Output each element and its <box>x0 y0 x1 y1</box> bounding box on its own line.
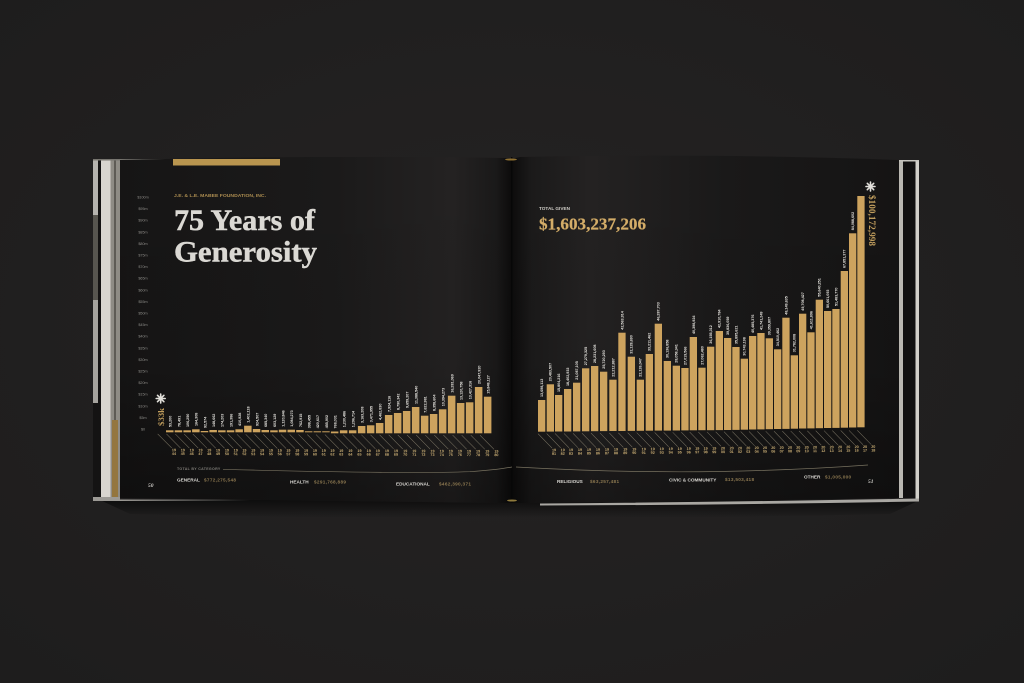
left year labels: 76 <box>458 453 462 457</box>
left year labels: 72 <box>421 453 425 457</box>
right bar value labels: 18,402,933 <box>566 368 570 386</box>
right year labels: 20 <box>846 445 850 449</box>
right year labels: 20 <box>796 446 800 450</box>
right bar value labels: 41,611,896 <box>809 311 813 329</box>
right bar value labels: 30,743,198 <box>743 337 747 356</box>
left year labels: 19 <box>440 449 444 453</box>
y axis labels: $85m <box>138 230 148 234</box>
right year labels: 01 <box>730 450 734 454</box>
right year labels: 20 <box>721 446 725 451</box>
left year labels: 66 <box>367 453 371 457</box>
right bar value labels: 50,661,093 <box>826 290 830 308</box>
right bar value labels: 32,128,690 <box>630 335 634 354</box>
right year labels: 98 <box>704 450 708 454</box>
left year labels: 80 <box>494 453 498 457</box>
total given: TOTAL GIVEN <box>539 206 571 211</box>
right year labels: 20 <box>863 445 867 449</box>
right bar value labels: 39,836,059 <box>726 317 730 335</box>
right bar value labels: 42,910,784 <box>718 309 722 328</box>
left year labels: 44 <box>172 452 177 456</box>
left year labels: 60 <box>313 452 317 456</box>
left page edge stack <box>93 159 250 501</box>
category totals: left page: GENERAL <box>177 478 200 482</box>
left year labels: 19 <box>421 449 425 453</box>
right year labels: 85 <box>587 452 591 456</box>
y axis labels: $25m <box>138 370 148 374</box>
left year labels: 19 <box>403 449 407 453</box>
right bar value labels: 21,087,105 <box>575 361 579 380</box>
left year labels: 78 <box>476 453 480 457</box>
y axis labels: $5m <box>139 416 147 420</box>
category totals: right page: CIVIC & COMMUNITY <box>669 478 717 482</box>
left year labels: 19 <box>357 449 362 453</box>
left year labels: 69 <box>394 453 398 457</box>
left year labels: 19 <box>485 450 489 454</box>
right year labels: 19 <box>651 447 655 451</box>
left year labels: 46 <box>190 452 194 456</box>
page number 50: 50 <box>148 483 154 489</box>
left year labels: 19 <box>269 449 273 453</box>
left year labels: 19 <box>313 449 317 453</box>
left year labels: 19 <box>181 448 185 452</box>
category totals: right page: RELIGIOUS <box>557 479 583 484</box>
left bar value labels: 9,659,207 <box>406 392 410 408</box>
right bar value labels: 67,851,377 <box>843 250 847 268</box>
left year labels: 19 <box>430 449 435 453</box>
left year labels: 19 <box>412 449 416 453</box>
right bar value labels: 22,126,047 <box>639 358 643 377</box>
category totals: left page: HEALTH <box>290 480 309 484</box>
right year labels: 82 <box>561 452 565 456</box>
right year labels: 88 <box>614 451 618 455</box>
right year labels: 11 <box>813 449 817 453</box>
left year labels: 19 <box>190 448 194 452</box>
category heading: TOTAL BY CATEGORY <box>177 467 221 471</box>
left year labels: 19 <box>207 448 211 452</box>
right bar value labels: 42,563,914 <box>620 310 624 330</box>
right bar value labels: 27,019,566 <box>683 347 687 365</box>
right year labels: 19 <box>552 448 556 452</box>
left year labels: 47 <box>198 452 203 456</box>
left year labels <box>172 448 498 457</box>
left bar value labels: 10,394,273 <box>442 388 446 406</box>
y axis labels: $45m <box>138 323 148 327</box>
right year labels: 20 <box>780 446 784 450</box>
left bar value labels: 4,462,830 <box>378 404 382 420</box>
right year labels: 19 <box>669 447 673 451</box>
left bar value labels: 603,129 <box>273 414 277 427</box>
right page edge frame <box>540 160 919 506</box>
category totals: right page: $13,503,418 <box>725 477 754 482</box>
right year labels: 19 <box>660 447 664 451</box>
left year labels: 19 <box>295 449 299 453</box>
left bar value labels: 174,203 <box>221 414 225 427</box>
right year labels: 96 <box>687 450 691 454</box>
right year labels: 20 <box>838 445 842 449</box>
left year labels: 52 <box>242 452 246 456</box>
left year labels: 56 <box>278 452 282 456</box>
right bar value labels: 13,698,113 <box>540 379 544 397</box>
category totals: left page <box>177 478 471 486</box>
left year labels: 55 <box>269 452 273 456</box>
right year labels: 20 <box>871 445 875 449</box>
right year labels: 84 <box>578 452 583 456</box>
right year labels: 19 <box>642 447 646 451</box>
left year labels: 50 <box>225 452 229 456</box>
left bar value labels: 11,388,540 <box>414 386 418 404</box>
left bar value labels: 1,084,273 <box>290 410 294 427</box>
right year labels: 20 <box>755 446 759 450</box>
right year labels: 14 <box>838 449 843 453</box>
right year labels: 20 <box>830 445 834 449</box>
left bar value labels: 7,622,981 <box>424 396 428 413</box>
right year labels: 05 <box>763 450 767 454</box>
right year labels: 99 <box>712 450 716 454</box>
right year labels: 19 <box>569 448 573 452</box>
y axis labels: $100m <box>137 196 149 200</box>
right year labels: 86 <box>596 451 600 455</box>
left year labels: 59 <box>304 452 308 456</box>
right bar value labels: 40,485,376 <box>751 315 755 333</box>
left year labels: 19 <box>458 449 462 453</box>
y axis labels: $55m <box>138 300 148 304</box>
left year labels: 19 <box>286 449 290 453</box>
y axis labels: $95m <box>138 207 148 211</box>
right year labels: 09 <box>796 449 800 453</box>
right year labels: 06 <box>771 450 775 454</box>
right year labels: 04 <box>755 450 760 454</box>
title: 75 Years of <box>174 205 316 237</box>
left bar value labels: 13,120,758 <box>460 382 464 400</box>
right bar value labels: 46,287,703 <box>657 302 661 321</box>
right year labels: 20 <box>763 446 767 450</box>
left bar value labels: 8,358,604 <box>432 394 436 411</box>
left year labels: 19 <box>216 448 220 452</box>
left bar value labels: 7,924,116 <box>388 396 392 412</box>
left bar value labels: 455,902 <box>325 415 329 428</box>
right bar value labels: 15,804,216 <box>557 374 561 392</box>
left bar value labels: 20,047,920 <box>478 366 482 384</box>
left year labels: 67 <box>376 453 380 457</box>
right year labels: 89 <box>623 451 627 455</box>
right bar value labels: 35,895,621 <box>734 326 738 344</box>
y axis labels: $80m <box>138 242 148 246</box>
right year labels: 03 <box>746 450 750 454</box>
left bar value labels: 13,427,316 <box>468 381 472 399</box>
gold tab <box>173 159 280 166</box>
bar chart: right page <box>538 196 875 456</box>
left year labels: 19 <box>242 449 246 453</box>
left year labels: 53 <box>251 452 255 456</box>
right year labels: 20 <box>738 446 742 450</box>
right year labels: 19 <box>695 447 699 451</box>
right year labels: 19 <box>712 447 716 451</box>
category totals: left page: EDUCATIONAL <box>396 482 430 486</box>
category totals: right page: $1,005,000 <box>825 474 852 480</box>
left year labels: 19 <box>260 449 264 453</box>
left bar value labels: 420,617 <box>316 415 320 428</box>
category totals: left page: $462,390,371 <box>439 482 471 486</box>
left year labels: 73 <box>430 453 435 457</box>
y axis labels <box>137 196 149 432</box>
bar chart: left page <box>158 366 498 457</box>
left year labels: 65 <box>357 453 362 457</box>
left bar value labels: 762,915 <box>299 414 303 427</box>
left bar value labels: 164,308 <box>195 413 199 426</box>
left bar value labels: 92,574 <box>203 416 207 428</box>
right year labels: 19 <box>587 448 591 452</box>
right year labels: 20 <box>805 446 809 450</box>
left year labels: 58 <box>295 452 299 456</box>
right bar value labels: 40,398,924 <box>692 315 696 334</box>
left bar value labels: 191,386 <box>229 414 233 427</box>
left year labels: 75 <box>449 453 453 457</box>
right year labels: 20 <box>730 446 734 450</box>
left year labels: 19 <box>251 449 255 453</box>
left year labels: 19 <box>278 449 282 453</box>
right year labels: 20 <box>746 446 750 450</box>
title <box>174 205 317 268</box>
left year labels: 79 <box>485 453 489 457</box>
left year labels: 71 <box>412 453 416 457</box>
icon: asterisk right <box>866 182 875 191</box>
right year labels: 19 <box>561 448 565 452</box>
left year labels: 57 <box>286 452 290 456</box>
left year labels: 19 <box>476 450 480 454</box>
right year labels: 87 <box>605 451 609 455</box>
title: Generosity <box>174 236 317 268</box>
right year labels: 10 <box>805 449 809 453</box>
right year labels: 20 <box>771 446 775 450</box>
left year labels: 19 <box>330 449 335 453</box>
right year labels: 19 <box>623 448 627 452</box>
y axis labels: $15m <box>138 393 148 397</box>
right bar value labels: 28,058,341 <box>675 344 679 363</box>
left bar value labels: 3,163,208 <box>360 407 364 423</box>
page number 51: 51 <box>868 479 874 485</box>
gutter highlights <box>505 157 517 503</box>
right bar value labels: 33,211,462 <box>648 333 652 351</box>
left bar value labels: 410,928 <box>238 413 242 426</box>
y axis labels: $50m <box>138 312 148 316</box>
right bar value labels: 31,782,008 <box>793 334 797 352</box>
right bar value labels: 41,741,249 <box>759 312 763 330</box>
total given: $1,603,237,206 <box>539 214 646 234</box>
left year labels: 74 <box>440 453 445 457</box>
left year labels: 70 <box>403 453 407 457</box>
icon: asterisk left <box>156 394 165 403</box>
y axis labels: $65m <box>138 277 148 281</box>
right diagonal leaders <box>538 430 871 448</box>
left year labels: 19 <box>376 449 380 453</box>
y axis labels: $35m <box>138 346 148 350</box>
right bar value labels: 27,062,480 <box>700 346 704 365</box>
left bar value labels: 106,250 <box>186 414 190 427</box>
left year labels: 19 <box>385 449 389 453</box>
category totals: left page: $772,275,548 <box>204 478 236 482</box>
right bar value labels: 20,483,507 <box>549 363 553 381</box>
right year labels: 20 <box>821 445 825 449</box>
left bars <box>166 387 491 433</box>
right year labels: 18 <box>871 448 875 453</box>
right bar value labels: 55,640,251 <box>818 278 822 297</box>
category totals: left page: $291,768,889 <box>314 480 346 484</box>
left bar value labels: 1,230,486 <box>342 411 346 427</box>
right year labels: 00 <box>721 450 725 454</box>
left year labels: 19 <box>348 449 352 453</box>
left year labels: 19 <box>198 448 203 452</box>
left bar value labels: 1,296,714 <box>352 410 356 427</box>
right page <box>512 156 899 503</box>
right year labels: 17 <box>863 449 867 453</box>
left bar value labels: 685,340 <box>264 414 268 427</box>
right year labels: 12 <box>821 449 825 453</box>
y axis labels: $10m <box>138 404 148 408</box>
right bar value labels: 30,136,858 <box>666 340 670 358</box>
right year labels: 08 <box>788 449 792 453</box>
left bar value labels: 924,507 <box>255 413 259 426</box>
right year labels: 19 <box>687 447 691 451</box>
total given <box>539 206 646 234</box>
left year labels: 68 <box>385 453 389 457</box>
right bars <box>538 196 865 432</box>
left year labels: 49 <box>216 452 220 456</box>
left year labels: 19 <box>304 449 308 453</box>
right year labels: 19 <box>578 448 582 452</box>
right bar value labels: 28,231,608 <box>593 345 597 363</box>
right year labels: 15 <box>846 449 850 453</box>
left year labels: 19 <box>494 450 498 454</box>
right year axis <box>538 430 875 456</box>
left bar value labels <box>169 366 490 428</box>
left year labels: 19 <box>234 449 238 453</box>
left diagonal leaders <box>158 434 494 449</box>
y axis labels: $40m <box>138 335 148 339</box>
left bar value labels: 398,455 <box>308 415 312 428</box>
y axis labels: $0 <box>141 428 145 432</box>
right bar value labels: 84,088,602 <box>851 212 855 230</box>
left bar value labels: 15,848,127 <box>486 375 490 394</box>
eyebrow: foundation name: J.E. & L.E. MABEE FOUNDATION, INC. <box>174 193 266 198</box>
right bar value labels: 51,483,770 <box>834 288 838 306</box>
right year labels: 20 <box>855 445 859 449</box>
right year labels: 19 <box>596 448 600 452</box>
category totals: right page <box>557 474 852 484</box>
left year labels: 45 <box>181 452 185 456</box>
right year labels: 16 <box>855 449 859 453</box>
left year labels: 19 <box>225 448 229 453</box>
right bar value labels: 36,155,312 <box>709 325 713 344</box>
left bar value labels: 16,281,069 <box>450 374 454 393</box>
left year labels: 51 <box>234 452 238 456</box>
left year labels: 77 <box>467 453 471 457</box>
left bar value labels: 8,790,342 <box>396 394 400 410</box>
right year labels: 92 <box>651 451 655 455</box>
y axis labels: $70m <box>138 265 148 269</box>
right bar value labels: 39,359,807 <box>768 317 772 335</box>
book shadow <box>100 500 920 518</box>
right year labels: 20 <box>788 446 792 450</box>
right year labels: 83 <box>569 452 573 456</box>
right year labels: 93 <box>660 451 664 455</box>
right year labels: 19 <box>614 448 618 452</box>
y axis labels: $20m <box>138 381 148 385</box>
left year labels: 19 <box>394 449 398 453</box>
category rules <box>223 465 868 472</box>
right bar value labels: 49,708,427 <box>801 292 805 311</box>
right bar value labels: 27,279,325 <box>584 347 588 365</box>
right year labels: 81 <box>552 452 556 456</box>
left year labels: 48 <box>207 452 211 456</box>
right year labels: 19 <box>704 447 708 451</box>
y axis labels: $30m <box>138 358 148 362</box>
left year labels: 63 <box>339 453 343 457</box>
left year labels: 61 <box>322 452 326 457</box>
left year labels: 19 <box>449 449 453 453</box>
right year labels <box>552 445 875 456</box>
left year labels: 62 <box>330 453 335 457</box>
right bar value labels: 25,720,293 <box>602 350 606 369</box>
right year labels: 19 <box>605 448 609 452</box>
right year labels: 13 <box>830 449 834 453</box>
category totals: right page: OTHER <box>804 474 821 480</box>
right year labels: 02 <box>738 450 742 454</box>
callout: peak year amount: $100,172,998 <box>866 195 877 246</box>
left bar value labels: 1,402,118 <box>247 406 251 423</box>
right year labels: 97 <box>695 450 699 454</box>
left year labels: 19 <box>367 449 371 453</box>
right year labels: 91 <box>642 451 646 455</box>
left bar value labels: 53,200 <box>169 416 173 427</box>
left year axis <box>158 434 498 457</box>
left year labels: 64 <box>348 453 353 457</box>
left year labels: 19 <box>339 449 343 453</box>
y axis labels: $75m <box>138 254 148 258</box>
right year labels: 95 <box>678 451 682 455</box>
right bar value labels: 34,510,462 <box>776 328 780 346</box>
right year labels: 19 <box>678 447 682 451</box>
right year labels: 19 <box>632 447 636 451</box>
callout: first year amount: $33k <box>156 408 166 426</box>
right year labels: 90 <box>632 451 636 455</box>
right bar value labels <box>540 212 855 397</box>
right bar value labels: 22,212,887 <box>611 358 615 377</box>
left year labels: 19 <box>467 449 471 453</box>
left bar value labels: 768,031 <box>334 415 338 428</box>
callout: first year amount <box>156 394 166 426</box>
left bar value labels: 3,471,955 <box>370 406 374 422</box>
right year labels: 20 <box>813 446 817 450</box>
left bar value labels: 78,491 <box>177 416 181 427</box>
right bar value labels: 48,149,635 <box>784 296 788 315</box>
y axis labels: $90m <box>138 219 148 223</box>
right year labels: 07 <box>780 449 784 454</box>
right year labels: 94 <box>669 451 674 455</box>
left year labels: 19 <box>172 448 176 452</box>
y axis labels: $60m <box>138 288 148 292</box>
left year labels: 19 <box>322 449 326 453</box>
left bar value labels: 148,662 <box>212 414 216 427</box>
left year labels: 54 <box>260 452 265 456</box>
left bar value labels: 1,120,846 <box>281 410 285 427</box>
category totals: right page: $63,257,481 <box>590 479 619 484</box>
left page <box>120 157 512 503</box>
